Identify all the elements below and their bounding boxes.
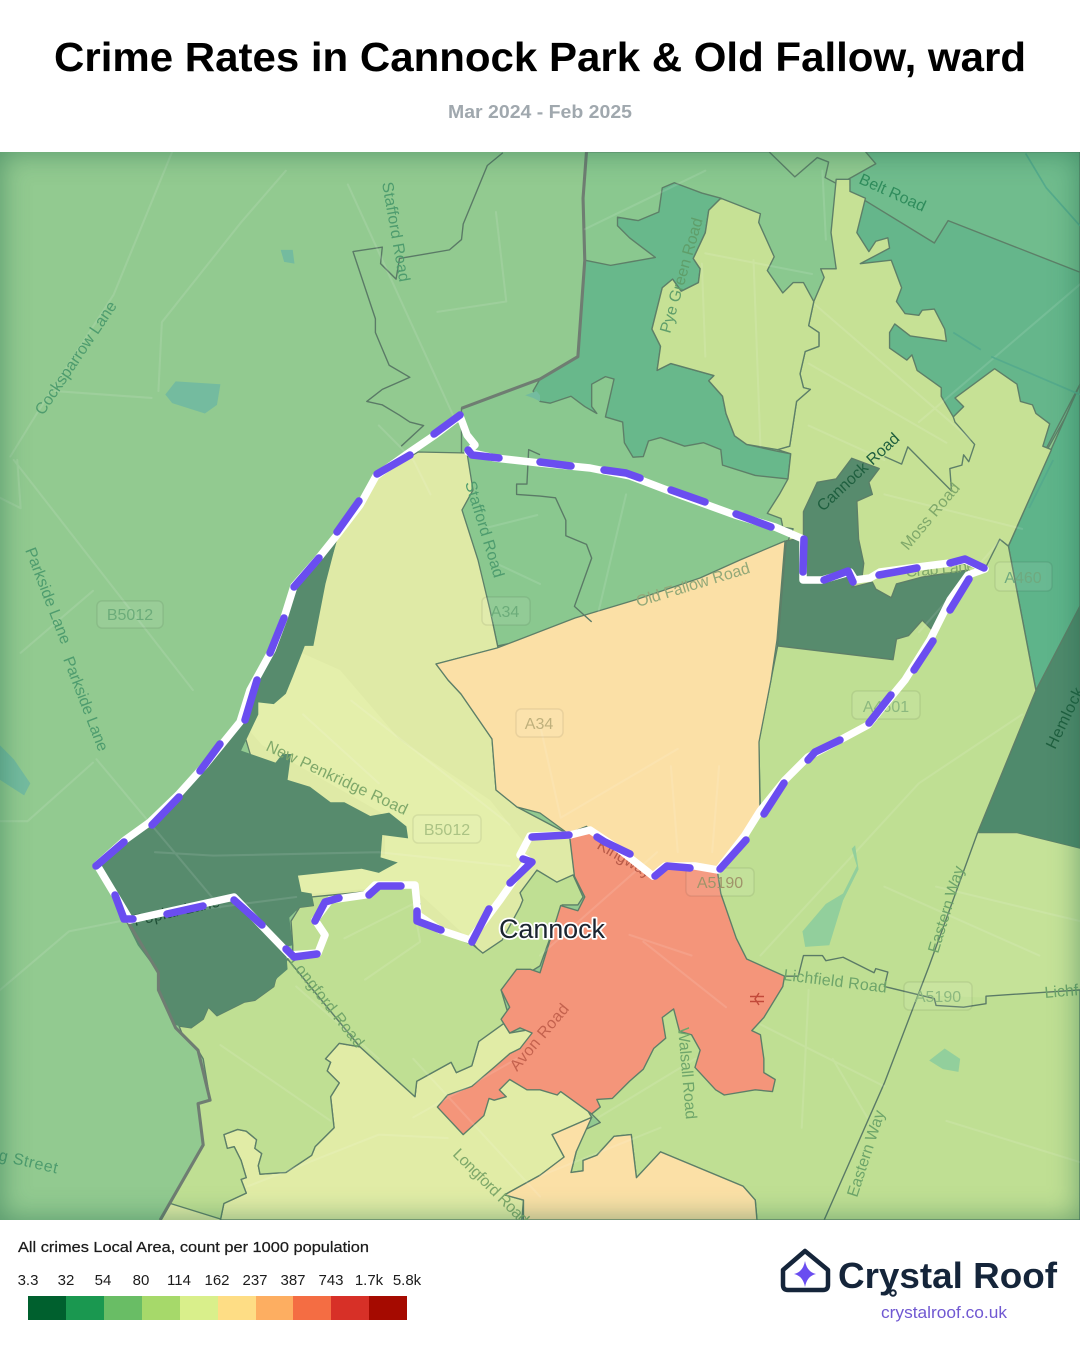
icon: Crystal Roof house logo bbox=[783, 1251, 828, 1290]
icon: railway station bbox=[750, 993, 764, 1005]
legend tick labels: 114 bbox=[167, 1272, 191, 1289]
area: Moss Road internal boundary bbox=[884, 417, 975, 491]
road label: Lichfield east: Lichf bbox=[1044, 982, 1080, 1002]
place label: Cannock: Cannock bbox=[499, 914, 606, 944]
road badge: B5012 west bbox=[97, 601, 163, 628]
legend tick labels: 743 bbox=[318, 1272, 344, 1289]
area: Crab Lane dark neighbourhood bbox=[778, 458, 970, 660]
faint road network bbox=[0, 152, 1080, 1197]
area: north central neighbourhood bbox=[456, 152, 850, 646]
road label: Cannock Road: Cannock Road bbox=[814, 430, 903, 515]
legend colour scale bbox=[28, 1296, 407, 1320]
road label: Stafford Road south: Stafford Road bbox=[461, 479, 507, 580]
road badge: B5012 centre: B5012 bbox=[424, 822, 470, 839]
road label: Parkside Lane upper: Parkside Lane bbox=[21, 545, 74, 647]
area: southern peach neighbourhood bbox=[505, 1117, 757, 1220]
road label: Lichfield Road: Lichfield Road bbox=[783, 967, 888, 997]
ward boundary route bbox=[96, 415, 985, 957]
area: south east lighter neighbourhood bbox=[978, 833, 1080, 990]
road label: Longford Road north: Longford Road bbox=[286, 954, 367, 1051]
road badge: B5012 west: B5012 bbox=[107, 607, 153, 624]
road label: Poplar Lane: Poplar Lane bbox=[132, 894, 222, 930]
title: Crime Rates in Cannock Park & Old Fallow, ward bbox=[54, 34, 1026, 80]
road label: Walsall Road: Walsall Road bbox=[674, 1027, 699, 1120]
brand website link: crystalroof.co.uk bbox=[881, 1304, 1008, 1322]
area: eastern teal neighbourhood bbox=[1008, 384, 1080, 690]
legend tick labels: 387 bbox=[280, 1272, 306, 1289]
thick boundary lines bbox=[127, 152, 1080, 1220]
road badge: A34 north: A34 bbox=[491, 604, 519, 621]
road label: Pye Green Road: Pye Green Road bbox=[658, 216, 707, 335]
area: south west dark neighbourhood bbox=[98, 537, 408, 1028]
road badge: A34 centre bbox=[516, 709, 563, 737]
area: south west green neighbourhood bbox=[160, 959, 360, 1220]
area: Pye Green dark neighbourhood bbox=[533, 183, 791, 479]
road badge: A460: A460 bbox=[1004, 570, 1042, 587]
road label: Belt Road: Belt Road bbox=[856, 171, 928, 216]
road badge: A5190 centre: A5190 bbox=[697, 875, 743, 892]
legend tick labels: 54 bbox=[95, 1272, 111, 1289]
road label: Crab Lane: Crab Lane bbox=[905, 558, 976, 581]
brand name: Crystal Roof bbox=[838, 1255, 1058, 1296]
road badge: A34 centre: A34 bbox=[525, 716, 553, 733]
road badge: A460 bbox=[995, 562, 1052, 591]
road label: Kingway: Kingway bbox=[594, 837, 654, 881]
road label: Longford Road south: Longford Road bbox=[449, 1146, 532, 1229]
road badge: A5190 east: A5190 bbox=[915, 989, 961, 1006]
legend tick labels bbox=[18, 1272, 422, 1289]
road badge: A5190 east bbox=[904, 982, 972, 1010]
area: Penkridge lighter interior bbox=[240, 650, 530, 940]
area: Pye Green yellow green neighbourhood bbox=[652, 198, 819, 450]
area: Penkridge pale neighbourhood bbox=[240, 452, 575, 955]
area: north east darker neighbourhood bbox=[858, 200, 1080, 448]
brand logo keyhole detail on the y bbox=[890, 1290, 896, 1296]
legend tick labels: 80 bbox=[133, 1272, 149, 1289]
legend tick labels: 162 bbox=[204, 1272, 230, 1289]
road label: Cocksparrow Lane: Cocksparrow Lane bbox=[32, 298, 121, 418]
subtitle: date range: Mar 2024 - Feb 2025 bbox=[448, 102, 632, 122]
area: south pale neighbourhood bbox=[220, 1019, 592, 1220]
legend title: All crimes Local Area, count per 1000 population bbox=[18, 1239, 369, 1256]
legend tick labels: 3.3 bbox=[18, 1272, 38, 1289]
road label: Eastern Way north: Eastern Way bbox=[926, 864, 968, 955]
area: Cannock Road yellow green neighbourhood bbox=[767, 179, 1051, 598]
road badge: A4601: A4601 bbox=[863, 699, 909, 716]
road label: Old Fallow Road: Old Fallow Road bbox=[634, 560, 752, 611]
road badge: A5190 centre bbox=[686, 868, 754, 896]
area: eastern green neighbourhood bbox=[540, 539, 1080, 1220]
road label: Moss Road: Moss Road bbox=[898, 480, 964, 554]
area: Cannock town centre salmon neighbourhood bbox=[437, 826, 785, 1135]
area: central green neighbourhood bbox=[288, 870, 583, 1097]
water: lakes and ponds bbox=[0, 153, 1080, 1072]
legend tick labels: 5.8k bbox=[393, 1272, 422, 1289]
road badge: A34 north bbox=[482, 597, 530, 625]
road label: Eastern Way south: Eastern Way bbox=[845, 1108, 889, 1199]
legend tick labels: 237 bbox=[242, 1272, 268, 1289]
road label: New Penkridge Road: New Penkridge Road bbox=[263, 738, 410, 819]
road label: Stafford Road north: Stafford Road bbox=[378, 181, 412, 283]
area: south west corner pale piece bbox=[162, 1203, 220, 1220]
legend tick labels: 32 bbox=[58, 1272, 74, 1289]
road label: Avon Road: Avon Road bbox=[507, 1001, 573, 1075]
road badge: B5012 centre bbox=[413, 815, 481, 843]
area: north east neighbourhood bbox=[848, 152, 1080, 448]
legend tick labels: 1.7k bbox=[355, 1272, 384, 1289]
area: central peach neighbourhood bbox=[436, 541, 785, 876]
map bbox=[0, 152, 1080, 1231]
road badge: A4601 bbox=[852, 691, 920, 719]
area: Hemlock dark neighbourhood bbox=[977, 606, 1080, 849]
road label: Parkside Lane lower: Parkside Lane bbox=[59, 654, 111, 754]
